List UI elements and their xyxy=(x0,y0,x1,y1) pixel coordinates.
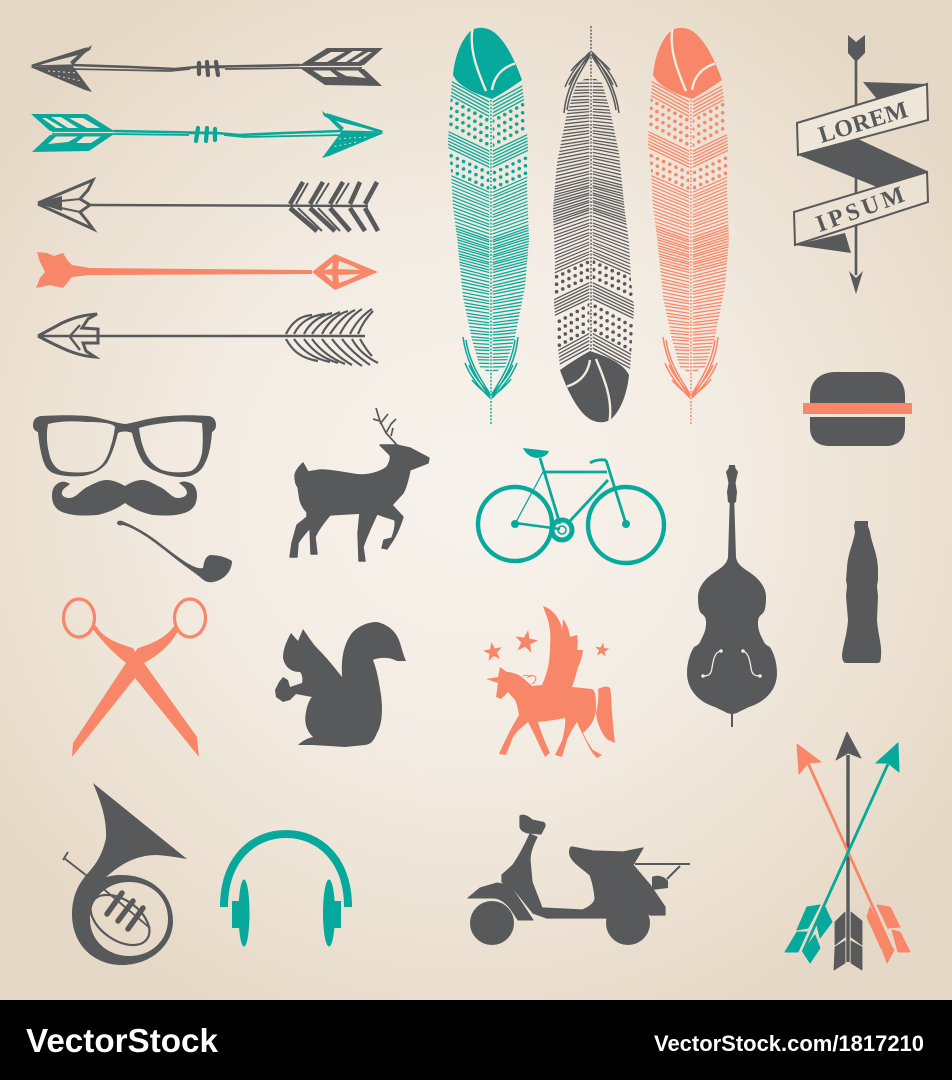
footer url text: VectorStock.com/1817210 xyxy=(654,1031,924,1056)
ribbon band: ipsum xyxy=(794,172,928,245)
teal arrow xyxy=(785,743,899,963)
arrow: gray with banded shaft xyxy=(30,45,383,92)
gray arrow xyxy=(834,732,862,970)
arrow shaft and tips xyxy=(848,35,865,294)
icon: headphones xyxy=(224,834,348,946)
icon: bicycle xyxy=(478,448,664,563)
icon: mustache xyxy=(52,480,197,516)
ribbon band: lorem xyxy=(797,84,928,155)
feather: gray xyxy=(545,25,637,422)
coral arrow xyxy=(797,744,910,963)
arrow: teal with banded shaft xyxy=(31,111,384,158)
icon: bottle xyxy=(842,521,881,663)
feather: coral xyxy=(645,28,737,425)
icon: scissors xyxy=(64,599,206,757)
icon: macaron xyxy=(803,372,912,446)
footer logo text: VectorStock xyxy=(26,1022,219,1059)
icon: squirrel xyxy=(275,622,406,747)
icon: glasses xyxy=(33,415,216,477)
feather: teal xyxy=(445,28,537,425)
arrow: coral xyxy=(36,252,378,290)
ribbon band: ipsum: IPSUM xyxy=(813,182,908,238)
icon: scooter xyxy=(468,815,690,945)
icon: double bass xyxy=(687,465,777,727)
ribbon tails and fold xyxy=(795,82,927,253)
arrow: gray chevron fletching xyxy=(37,180,378,231)
footer bar xyxy=(0,1000,952,1080)
icon: crossed arrows xyxy=(785,732,910,970)
ribbon with arrow xyxy=(794,35,928,294)
ribbon band: lorem: LOREM xyxy=(816,97,911,149)
icon: french horn xyxy=(63,783,187,965)
icon: deer xyxy=(290,408,429,561)
arrow: gray feathered xyxy=(38,309,378,366)
icon: pipe xyxy=(117,521,232,582)
icon: winged unicorn xyxy=(482,606,615,758)
